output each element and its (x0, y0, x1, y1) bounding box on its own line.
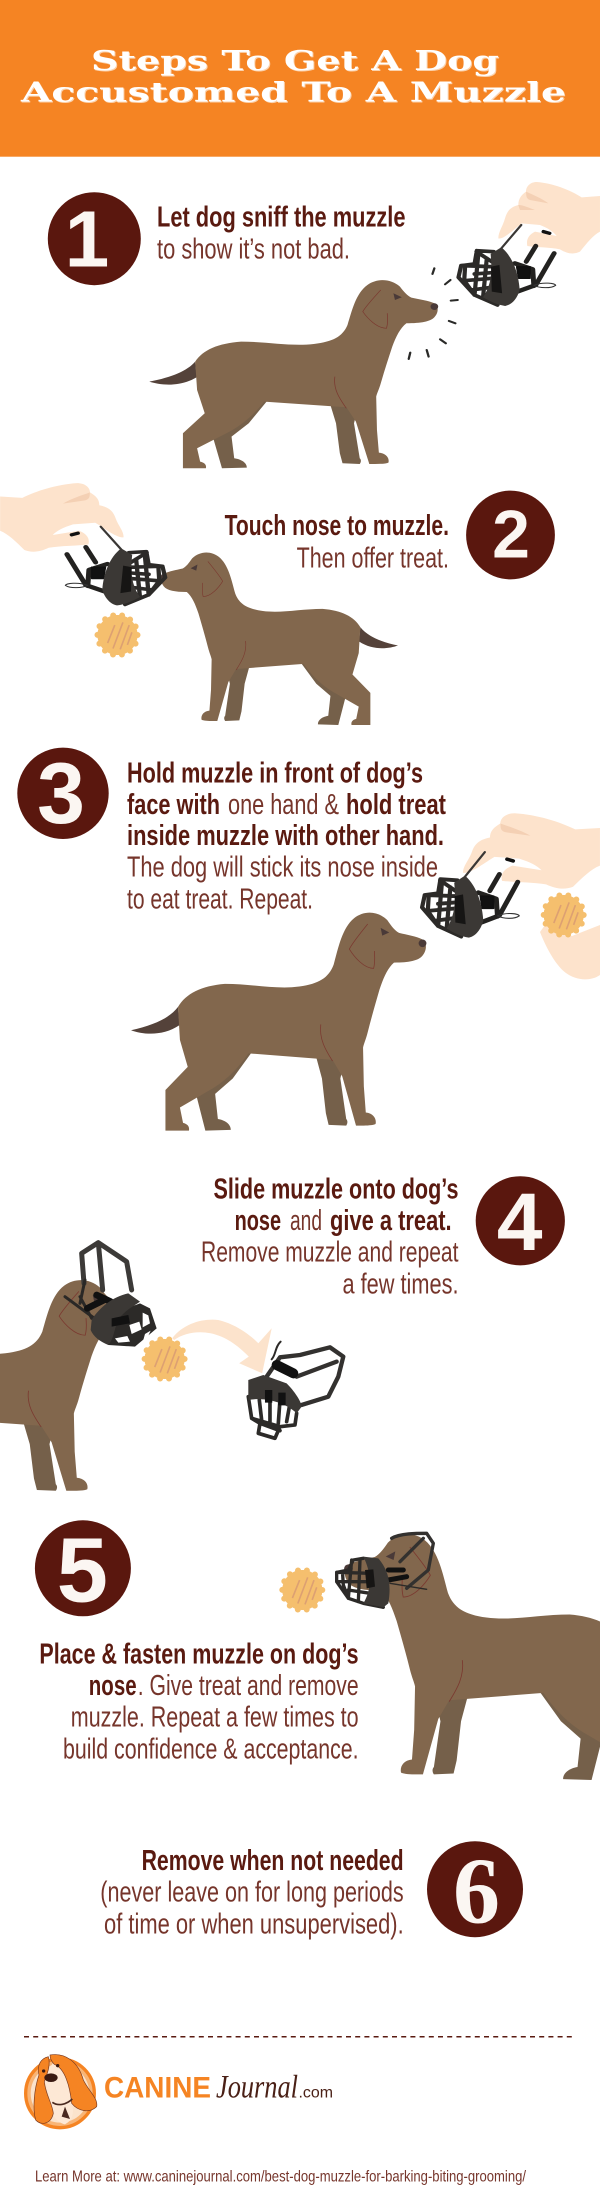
step 2 text: Touch nose to muzzle. (225, 510, 449, 542)
step 5 text: nose (89, 1670, 137, 1702)
step 4 text: a few times. (342, 1268, 458, 1300)
step 5 text: Place & fasten muzzle on dog’s (39, 1638, 359, 1670)
step 1 text: to show it’s not bad. (157, 233, 350, 265)
step 5 text (39, 1638, 359, 1765)
step 4 curved arrow (172, 1320, 272, 1373)
step 3 text: inside muzzle with other hand. (127, 820, 444, 852)
step 5 dog (344, 1534, 600, 1780)
step 5 text: build confidence & acceptance. (63, 1733, 359, 1765)
step 4 text: Slide muzzle onto dog’s (214, 1173, 458, 1205)
step 6 number badge: 6 (453, 1840, 500, 1944)
step 1 muzzle (458, 225, 556, 306)
step 2 muzzle (65, 527, 165, 605)
step 3 text: Hold muzzle in front of dog’s (127, 758, 423, 790)
step 4 number badge: 4 (497, 1177, 543, 1268)
step 5 number badge (35, 1520, 131, 1622)
step 1 number badge (48, 192, 141, 285)
step 3 text: The dog will stick its nose inside (127, 852, 438, 884)
step 4 muzzle on dog (65, 1243, 157, 1347)
step 3 text (127, 758, 446, 915)
step 2 number badge (466, 491, 555, 579)
step 3 number badge: 3 (37, 746, 85, 842)
step 4 text: give a treat. (330, 1205, 452, 1237)
header band (0, 0, 600, 157)
step 1 text: Let dog sniff the muzzle (157, 202, 406, 234)
step 4 text: and (290, 1205, 322, 1237)
step 3 text: to eat treat. Repeat. (127, 883, 313, 915)
step 6 text: Remove when not needed (142, 1845, 404, 1877)
step 3 text: face with (127, 789, 220, 821)
step 1 dog (149, 280, 438, 468)
step 2 dog (161, 552, 398, 725)
step 5 text: . Give treat and remove (138, 1670, 359, 1702)
logo wordmark (104, 2070, 333, 2106)
step 2 treat (98, 615, 138, 655)
step 6 text (100, 1845, 404, 1940)
logo wordmark: CANINE (104, 2072, 211, 2105)
logo wordmark: .com (298, 2085, 333, 2102)
step 5 muzzle on dog (337, 1533, 433, 1607)
title (20, 45, 566, 109)
step 5 number badge: 5 (57, 1520, 108, 1622)
step 1 hand (498, 182, 600, 253)
step 5 treat (282, 1570, 322, 1610)
step 4 text: Remove muzzle and repeat (201, 1237, 458, 1269)
title: Accustomed To A Muzzle (20, 77, 566, 109)
step 3 dog (131, 913, 426, 1131)
step 3 muzzle (422, 852, 519, 938)
step 3 number badge (17, 746, 109, 842)
step 4 treat (145, 1339, 185, 1379)
step 3 treat (544, 895, 584, 935)
step 4 number badge (476, 1176, 565, 1268)
logo: Canine Journal badge (26, 2055, 97, 2128)
step 4 text (201, 1173, 458, 1300)
step 3 lower hand (540, 925, 600, 979)
step 4 text: nose (235, 1205, 281, 1237)
step 5 text: muzzle. Repeat a few times to (71, 1702, 359, 1734)
step 3 text: hold treat (346, 789, 446, 821)
step 6 text: (never leave on for long periods (100, 1877, 404, 1909)
step 3 upper hand (463, 813, 600, 889)
step 6 number badge (427, 1840, 523, 1944)
step 1 sniff ticks (409, 268, 458, 359)
title: Steps To Get A Dog (91, 45, 499, 77)
step 2 number badge: 2 (492, 496, 530, 572)
step 1 text (157, 202, 406, 265)
logo wordmark: Journal (216, 2070, 298, 2106)
step 2 text: Then offer treat. (297, 542, 449, 574)
step 2 hand (0, 483, 124, 552)
step 4 dog (0, 1280, 142, 1496)
step 6 text: of time or when unsupervised). (104, 1908, 404, 1940)
step 1 number badge: 1 (65, 194, 109, 284)
step 3 text: one hand & (228, 789, 339, 821)
step 4 removed muzzle (248, 1342, 343, 1438)
step 2 text (225, 510, 449, 574)
